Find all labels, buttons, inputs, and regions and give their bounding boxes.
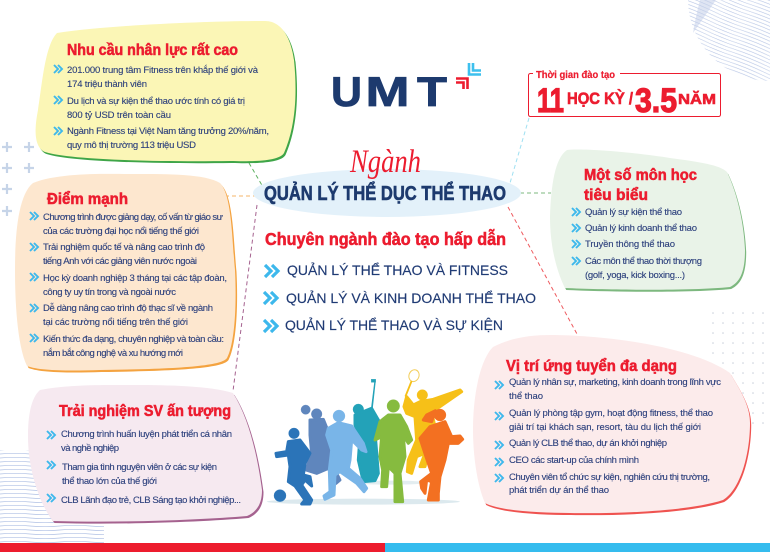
bullet list: Chương trình được giảng dạy, cố vấn từ giáo sư	[43, 212, 224, 223]
bullet list	[54, 65, 269, 151]
logo: UMT: T	[417, 68, 447, 115]
logo: UMT: U	[331, 68, 362, 115]
bullet list: quy mô thị trường 113 triệu USD	[67, 140, 196, 151]
bullet list: Trải nghiệm quốc tế và nâng cao trình độ	[43, 242, 205, 253]
heading: chuyên ngành: Chuyên ngành đào tạo hấp dẫn	[265, 228, 506, 249]
bullet list: CEO các start-up của chính mình	[509, 455, 639, 466]
athlete: runner orange	[420, 409, 463, 500]
bullet list: (golf, yoga, kick boxing...)	[585, 270, 685, 281]
panel: trải nghiệm SV	[28, 385, 264, 524]
bullet list: tiếng Anh với các giảng viên nước ngoài	[43, 256, 197, 267]
athlete: runner green	[375, 400, 412, 502]
bullet list: Chương trình huấn luyện phát triển cá nhân	[61, 429, 232, 440]
bullet list: Ngành Fitness tại Việt Nam tăng trưởng 20%/năm,	[67, 126, 269, 137]
title script: Ngành	[349, 144, 421, 180]
bullet list: giải trí tại khách sạn, resort, tàu du lịch thế giới	[509, 422, 701, 433]
logo: UMT: M	[366, 68, 410, 115]
bullet list: Chuyên viên tổ chức sự kiện, nghiên cứu thị trường,	[509, 472, 710, 483]
panel: môn học tiêu biểu	[550, 150, 746, 292]
center title ellipse	[253, 169, 521, 217]
bullet list: nắm bắt công nghệ và xu hướng mới	[43, 348, 183, 359]
heading: Một số môn học	[584, 167, 697, 184]
bullet list	[572, 207, 702, 281]
bullet list: Quản lý phòng tập gym, hoạt động fitness, thể thao	[509, 408, 713, 419]
athlete: golfer	[353, 379, 379, 482]
bullet list: 174 triệu thành viên	[67, 79, 147, 90]
logo: UMT	[331, 63, 481, 115]
athlete: soccer	[274, 428, 312, 504]
value: NĂM	[678, 91, 716, 108]
panel: thời gian đào tạo	[528, 69, 720, 120]
logo mark: cross arrows	[456, 63, 481, 89]
bullet list: và nghề nghiệp	[61, 443, 119, 454]
list: chuyên ngành: QUẢN LÝ THỂ THAO VÀ SỰ KIỆN	[285, 316, 503, 333]
bullet list: Các môn thể thao thời thượng	[585, 256, 702, 267]
value: HỌC KỲ /	[567, 89, 633, 108]
list: chuyên ngành	[264, 261, 536, 333]
bullet list: Tham gia tình nguyện viên ở các sự kiện	[62, 462, 217, 473]
panel: vị trí ứng tuyển	[473, 335, 751, 515]
value: 3.5	[635, 82, 677, 120]
bullet list	[47, 429, 241, 506]
heading: Điểm mạnh	[47, 190, 128, 208]
bullet list: 800 tỷ USD trên toàn cầu	[67, 110, 171, 121]
bullet list: thể thao	[509, 391, 543, 402]
bullet list: Học kỳ doanh nghiệp 3 tháng tại các tập đoàn,	[43, 273, 227, 284]
bullet list: của các trường đại học nổi tiếng thế giới	[43, 226, 199, 237]
bullet list	[495, 377, 721, 496]
bullet list: CLB Lãnh đạo trẻ, CLB Sáng tạo khởi nghiệp...	[61, 495, 241, 506]
label: Thời gian đào tạo	[536, 69, 615, 81]
athlete: badminton	[404, 368, 462, 473]
bullet list: Quản lý CLB thể thao, dự án khởi nghiệp	[509, 438, 667, 449]
value: 11	[537, 82, 564, 120]
athlete: basketball	[301, 405, 340, 483]
bullet list: công ty uy tín trong và ngoài nước	[43, 287, 176, 298]
bullet list: Kiến thức đa dạng, chuyên nghiệp và toàn cầu:	[43, 334, 224, 345]
bullet list	[30, 212, 227, 359]
footer bars	[0, 543, 770, 552]
bullet list: tại các trường nổi tiếng trên thế giới	[43, 317, 188, 328]
decoration: plus marks	[2, 142, 34, 216]
heading: tiêu biểu	[584, 186, 648, 204]
bullet list: Quản lý kinh doanh thể thao	[585, 223, 697, 234]
title main: QUẢN LÝ THỂ DỤC THỂ THAO	[264, 181, 506, 205]
bullet list: 201.000 trung tâm Fitness trên khắp thế giới và	[67, 65, 259, 76]
heading	[584, 167, 697, 204]
dashed connectors	[225, 118, 577, 391]
heading: Vị trí ứng tuyển đa dạng	[506, 357, 677, 375]
illustration: athletes	[267, 368, 463, 505]
heading: Trải nghiệm SV ấn tượng	[59, 403, 231, 420]
bullet list: Quản lý sự kiện thể thao	[585, 207, 682, 218]
bullet list: Quản lý nhân sự, marketing, kinh doanh trong lĩnh vực	[509, 377, 721, 388]
athlete: runner light blue	[324, 410, 367, 499]
panel: nhu cầu nhân lực	[36, 21, 297, 163]
bullet list: Du lịch và sự kiện thể thao ước tính có giá trị	[67, 96, 245, 107]
heading: Nhu cầu nhân lực rất cao	[67, 42, 238, 59]
panel: điểm mạnh	[15, 174, 237, 373]
list: chuyên ngành: QUẢN LÝ VÀ KINH DOANH THỂ THAO	[286, 289, 536, 306]
bullet list: thể thao lớn của thế giới	[62, 476, 157, 487]
list: chuyên ngành: QUẢN LÝ THỂ THAO VÀ FITNESS	[287, 261, 508, 278]
bullet list: Truyền thông thể thao	[585, 239, 675, 250]
bullet list: Dễ dàng nâng cao trình độ thạc sĩ về ngành	[43, 303, 213, 314]
value	[537, 82, 716, 120]
bullet list: phát triển dự án thể thao	[509, 485, 609, 496]
